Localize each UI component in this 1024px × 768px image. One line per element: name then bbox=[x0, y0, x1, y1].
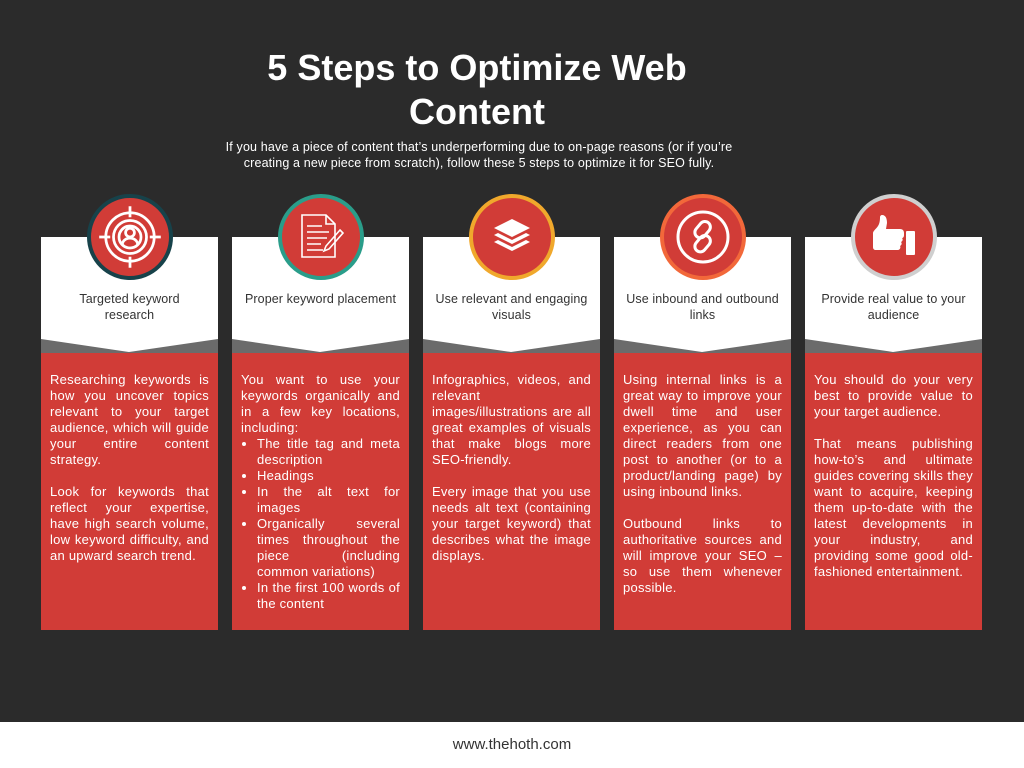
text block bbox=[423, 353, 600, 630]
text block: Using internal links is a great way to improve your dwell time and user experience, as you can direct readers from one post to another (or to a product/landing page) by using inbound links. bbox=[623, 372, 782, 499]
text block: The title tag and meta description bbox=[257, 436, 400, 467]
text block: You should do your very best to provide value to your target audience. bbox=[814, 372, 973, 419]
heading: audience bbox=[868, 308, 919, 322]
text block: Every image that you use needs alt text (containing your target keyword) that describes what the image displays. bbox=[432, 484, 591, 563]
text block: Headings bbox=[257, 468, 314, 483]
heading: Targeted keyword bbox=[79, 292, 180, 306]
panel: step 3 bbox=[423, 194, 600, 630]
heading bbox=[436, 292, 587, 322]
text block: In the first 100 words of the content bbox=[257, 580, 400, 611]
heading: visuals bbox=[492, 308, 531, 322]
text block: Look for keywords that reflect your expertise, have high search volume, low keyword difficulty, and an upward search trend. bbox=[50, 484, 209, 563]
panel: step 1 bbox=[41, 194, 218, 630]
panel: step 2 bbox=[232, 194, 409, 630]
heading: Proper keyword placement bbox=[245, 292, 396, 306]
title: 5 Steps to Optimize Web bbox=[267, 47, 687, 88]
text block: Infographics, videos, and relevant images/illustrations are all great examples of visuals that make blogs more SEO-friendly. bbox=[432, 372, 591, 467]
text block bbox=[232, 353, 409, 630]
panel: step 5 bbox=[805, 194, 982, 630]
text block: You want to use your keywords organically and in a few key locations, including: bbox=[241, 372, 400, 435]
heading: Use inbound and outbound bbox=[626, 292, 779, 306]
text block: In the alt text for images bbox=[257, 484, 400, 515]
text block: Organically several times throughout the piece (including common variations) bbox=[257, 516, 400, 579]
heading: Use relevant and engaging bbox=[436, 292, 587, 306]
icon: document bbox=[278, 194, 364, 280]
icon: link bbox=[660, 194, 746, 280]
heading bbox=[821, 292, 966, 322]
footer: www.thehoth.com bbox=[453, 736, 571, 753]
title bbox=[267, 47, 687, 132]
text block: Researching keywords is how you uncover topics relevant to your target audience, which will guide your entire content strategy. bbox=[50, 372, 209, 467]
panel: step 4 bbox=[614, 194, 791, 630]
footer bbox=[0, 722, 1024, 768]
text block bbox=[614, 353, 791, 630]
heading bbox=[626, 292, 779, 322]
icon: thumbs up bbox=[851, 194, 937, 280]
heading bbox=[79, 292, 180, 322]
icon: layers bbox=[469, 194, 555, 280]
subtitle: If you have a piece of content that’s underperforming due to on-page reasons (or if you’re creating a new piece from scratch), follow these 5 steps to optimize it for SEO fully. bbox=[226, 140, 732, 170]
title: Content bbox=[409, 91, 545, 132]
text block bbox=[805, 353, 982, 630]
text block: Outbound links to authoritative sources and will improve your SEO – so use them whenever possible. bbox=[623, 516, 782, 595]
icon: target bbox=[87, 194, 173, 280]
heading: Provide real value to your bbox=[821, 292, 966, 306]
text block: That means publishing how-to’s and ultimate guides covering skills they want to acquire, keeping them up-to-date with the latest developments in your industry, and providing some good old-fashioned entertainment. bbox=[814, 436, 973, 579]
text block bbox=[41, 353, 218, 630]
heading: research bbox=[105, 308, 154, 322]
heading: links bbox=[690, 308, 715, 322]
